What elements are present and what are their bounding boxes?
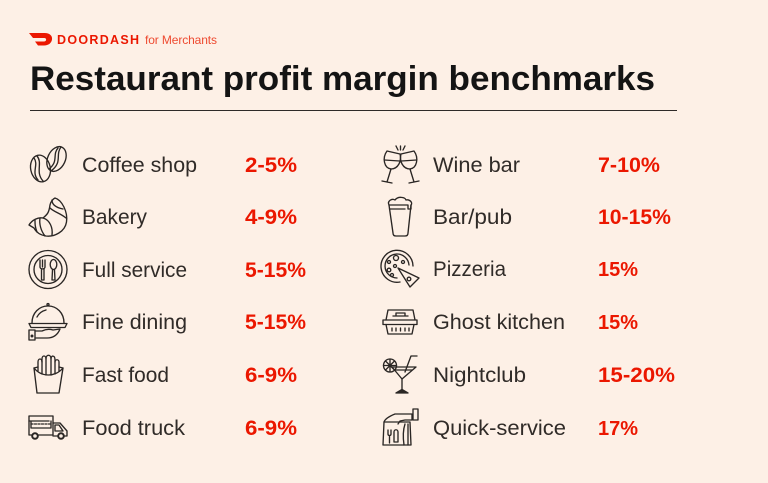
row: pizzeria	[381, 250, 638, 287]
icon: french fries	[34, 355, 63, 393]
label: Ghost kitchen	[433, 311, 565, 334]
label: Quick-service	[433, 417, 566, 440]
row: coffee shop	[28, 143, 297, 184]
icon: pizza with slice	[381, 250, 419, 287]
label: Pizzeria	[433, 258, 506, 281]
label: Food truck	[82, 417, 186, 440]
logo: DoorDash for Merchants	[29, 33, 217, 47]
value: 15%	[598, 312, 638, 334]
panel: left column	[28, 143, 306, 440]
row: full service	[29, 250, 306, 288]
value: 6-9%	[245, 364, 297, 387]
label: Fine dining	[82, 311, 187, 334]
row: fine dining	[29, 304, 306, 340]
row: quick-service	[383, 409, 638, 445]
value: 15%	[598, 259, 638, 281]
panel: right column	[381, 146, 675, 445]
title: Restaurant profit margin benchmarks	[30, 60, 655, 98]
row: bakery	[29, 198, 297, 236]
row: nightclub	[384, 356, 675, 393]
icon: cocktail	[384, 356, 417, 393]
row: wine bar	[382, 146, 660, 183]
icon: serving cloche on hand	[29, 304, 67, 340]
icon: takeout box	[383, 310, 417, 334]
row: fast food	[34, 355, 297, 393]
row: bar/pub	[389, 197, 671, 236]
icon: food truck	[29, 416, 67, 439]
icon: hand holding takeout bag	[383, 409, 418, 445]
value: 4-9%	[245, 206, 297, 229]
value: 15-20%	[598, 364, 675, 387]
icon: DoorDash swoosh	[29, 33, 52, 46]
icon: beer pint	[389, 197, 412, 236]
brand suffix: for Merchants	[145, 33, 217, 47]
label: Full service	[82, 259, 187, 282]
value: 5-15%	[245, 259, 306, 282]
row: ghost kitchen	[383, 310, 638, 334]
value: 17%	[598, 418, 638, 440]
label: Wine bar	[433, 154, 520, 177]
row: food truck	[29, 416, 297, 440]
value: 2-5%	[245, 154, 297, 177]
label: Fast food	[82, 364, 169, 387]
label: Bakery	[82, 206, 147, 229]
label: Bar/pub	[433, 206, 512, 229]
label: Coffee shop	[82, 154, 197, 177]
value: 6-9%	[245, 417, 297, 440]
icon: croissant	[29, 198, 67, 236]
icon: clinking wine glasses	[382, 146, 419, 183]
brand wordmark: DOORDASH	[57, 33, 139, 47]
label: Nightclub	[433, 364, 526, 387]
icon: plate with fork and spoon	[29, 250, 67, 288]
value: 5-15%	[245, 311, 306, 334]
value: 10-15%	[598, 206, 671, 229]
icon: coffee beans	[28, 143, 70, 184]
value: 7-10%	[598, 154, 660, 177]
